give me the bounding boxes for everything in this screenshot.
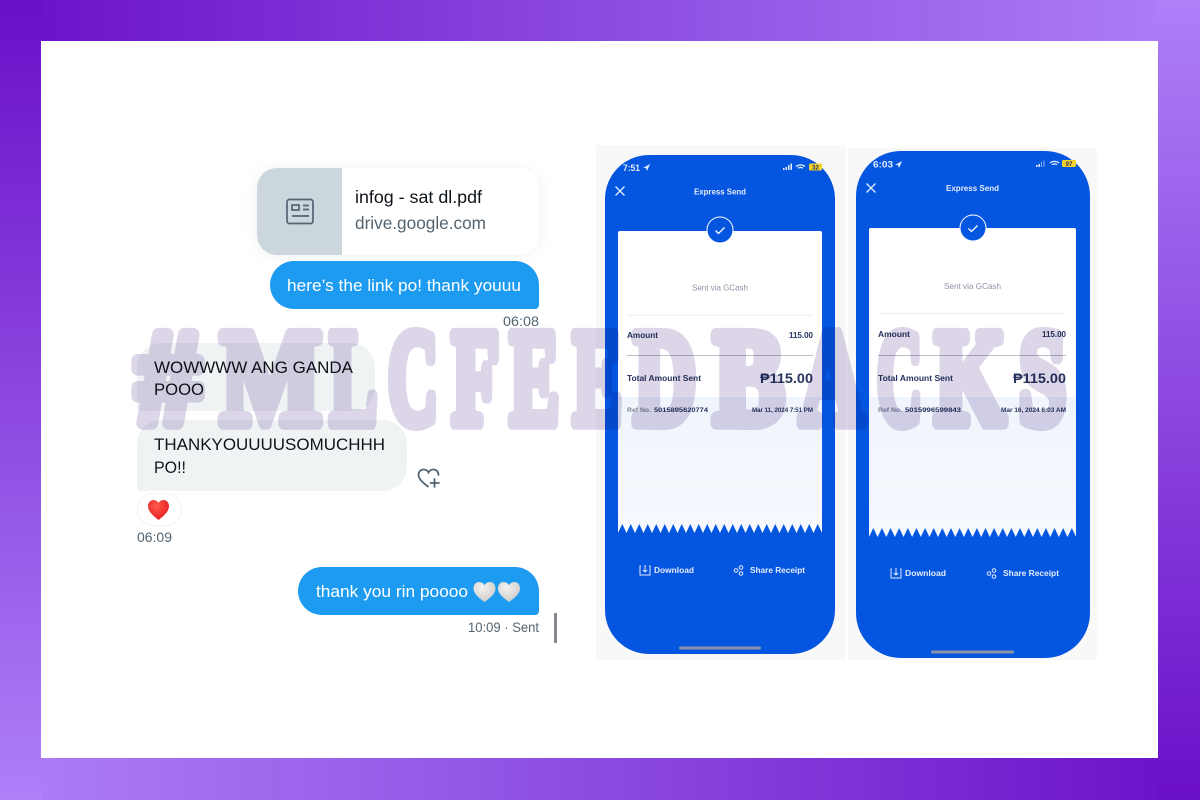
sent message bubble: thank you rin: thank you rin poooo bbox=[316, 582, 468, 601]
receipt details: Sent via GCash bbox=[944, 281, 1001, 291]
receipt details: Ref No. bbox=[627, 407, 651, 414]
watermark hashtag: M bbox=[221, 303, 321, 452]
status bar and header: 7:51 bbox=[623, 163, 641, 174]
watermark hashtag: E bbox=[573, 303, 622, 452]
panel: receipt screenshot 1 bbox=[596, 145, 846, 660]
receipt details: 115.00 bbox=[789, 331, 814, 340]
timestamp 10:09 sent: 10:09 · Sent bbox=[468, 619, 539, 635]
status bar and header: 6:03 bbox=[873, 160, 893, 170]
receipt details: 5015895620774 bbox=[654, 407, 708, 414]
link preview card bbox=[257, 168, 539, 255]
receipt details: 115.00 bbox=[1042, 330, 1067, 339]
download action: Download bbox=[654, 566, 694, 575]
receipt card bbox=[869, 228, 1076, 537]
receipt details: 5015996599843 bbox=[905, 407, 961, 414]
received message bubble: wow bbox=[137, 343, 375, 411]
sent message bubble: link bbox=[270, 261, 539, 309]
watermark hashtag: C bbox=[877, 303, 922, 452]
received message bubble: thank you bbox=[137, 420, 407, 491]
received message bubble: thank you: PO!! bbox=[154, 459, 186, 477]
receipt details: Sent via GCash bbox=[692, 282, 748, 292]
home indicator bbox=[679, 646, 761, 650]
icon: add reaction heart bbox=[418, 470, 439, 487]
reaction pill with red heart bbox=[138, 494, 182, 526]
receipt details: Amount bbox=[627, 331, 658, 340]
receipt details: Ref No. bbox=[878, 407, 902, 414]
share receipt action bbox=[734, 566, 805, 575]
panel: chat conversation bbox=[137, 168, 557, 643]
icon: white hearts bbox=[474, 582, 520, 602]
watermark hashtag: S bbox=[1019, 303, 1066, 452]
share receipt action bbox=[987, 569, 1059, 578]
link preview card: infog - sat dl.pdf bbox=[355, 187, 482, 207]
status bar and header: Express Send bbox=[694, 186, 746, 196]
watermark hashtag: F bbox=[452, 303, 499, 452]
watermark hashtag: # bbox=[136, 303, 200, 452]
receipt details: Mar 16, 2024 6:03 AM bbox=[1001, 407, 1066, 414]
icon: article bbox=[287, 200, 313, 224]
watermark hashtag: C bbox=[388, 303, 438, 452]
received message bubble: wow: WOWWWW ANG GANDA bbox=[154, 359, 353, 377]
sent message bubble: link: here’s the link po! thank youuu bbox=[287, 276, 521, 295]
icon: check badge bbox=[707, 217, 733, 243]
status bar and header bbox=[866, 160, 1076, 193]
watermark hashtag: L bbox=[330, 303, 377, 452]
status bar and header: 97 bbox=[1066, 162, 1073, 168]
receipt details: ₱115.00 bbox=[1013, 370, 1066, 386]
receipt details: Mar 11, 2024 7:51 PM bbox=[752, 407, 813, 414]
sent message bubble: thank you rin bbox=[298, 567, 539, 615]
status bar and header: 32 bbox=[812, 166, 819, 172]
download action bbox=[891, 568, 946, 578]
receipt details: Amount bbox=[878, 330, 910, 339]
timestamp 06:09: 06:09 bbox=[137, 529, 172, 545]
status bar and header: Express Send bbox=[946, 183, 999, 193]
watermark hashtag bbox=[136, 303, 1066, 452]
watermark hashtag: E bbox=[510, 303, 559, 452]
receipt details bbox=[627, 282, 814, 414]
timestamp 06:08: 06:08 bbox=[503, 313, 539, 329]
share receipt action: Share Receipt bbox=[750, 566, 805, 575]
home indicator bbox=[931, 650, 1014, 654]
watermark hashtag: A bbox=[800, 303, 864, 452]
download action: Download bbox=[905, 569, 946, 578]
received message bubble: thank you: THANKYOUUUUSOMUCHHH bbox=[154, 436, 385, 454]
share receipt action: Share Receipt bbox=[1003, 569, 1059, 578]
receipt details: ₱115.00 bbox=[760, 370, 813, 386]
download action bbox=[640, 565, 694, 575]
receipt details bbox=[878, 281, 1067, 414]
receipt details: Total Amount Sent bbox=[878, 374, 953, 383]
status bar and header bbox=[616, 163, 822, 196]
receipt details: Total Amount Sent bbox=[627, 374, 701, 383]
scrollbar bbox=[554, 613, 557, 643]
panel: receipt screenshot 2 bbox=[848, 148, 1097, 660]
icon: check badge bbox=[960, 215, 986, 241]
link preview card: drive.google.com bbox=[355, 213, 486, 233]
watermark hashtag: B bbox=[714, 303, 784, 452]
watermark hashtag: K bbox=[935, 303, 1005, 452]
watermark hashtag: D bbox=[634, 303, 696, 452]
received message bubble: wow: POOO bbox=[154, 381, 204, 399]
receipt card bbox=[618, 231, 822, 533]
